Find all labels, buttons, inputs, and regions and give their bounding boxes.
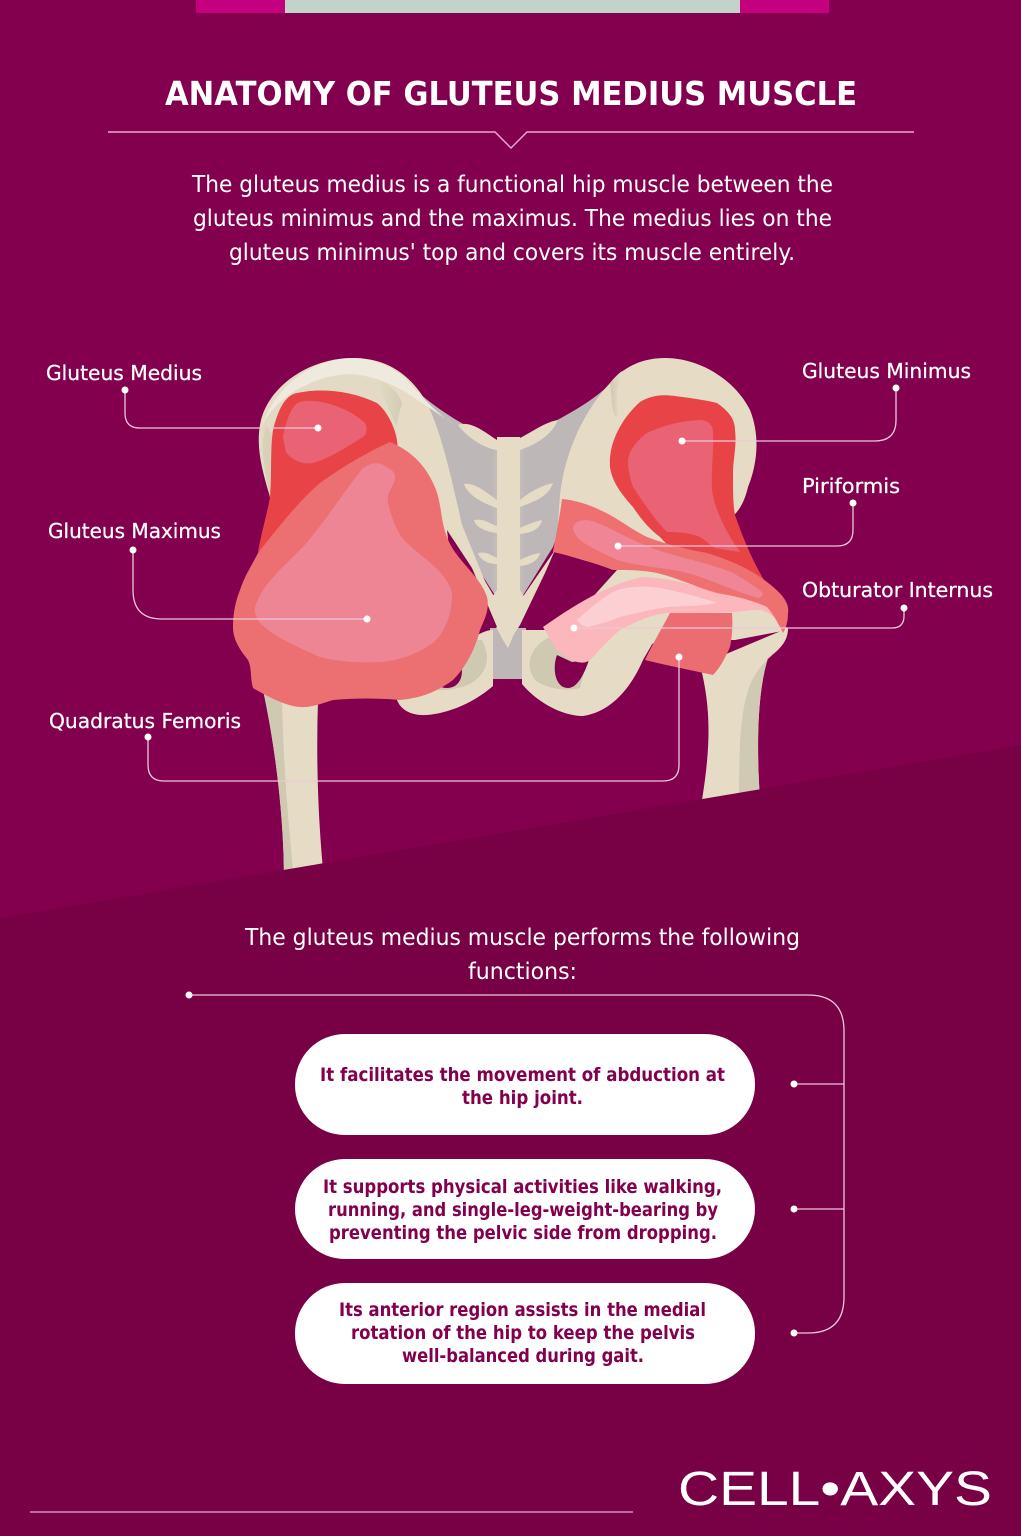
label: Obturator Internus [570, 578, 993, 632]
muscle: piriformis [553, 499, 788, 633]
intro text: gluteus minimus and the maximus. The medius lies on the [193, 204, 832, 232]
femur: left [263, 690, 324, 880]
pubis: left [397, 630, 493, 715]
pubis: right [522, 600, 670, 716]
muscle: gluteus medius (left) [258, 390, 400, 552]
function pill 2: running, and single-leg-weight-bearing by [328, 1200, 718, 1221]
function pill 2 [295, 1159, 755, 1259]
muscle: gluteus maximus (left) [233, 442, 488, 707]
ligaments: grey sacral area [405, 380, 612, 597]
footer line [30, 1511, 633, 1513]
label: Gluteus Maximus: Gluteus Maximus [48, 519, 221, 543]
label: Piriformis: Piriformis [802, 474, 900, 498]
intro text: gluteus minimus' top and covers its muscle entirely. [229, 238, 795, 266]
label: Gluteus Maximus [48, 519, 370, 622]
function pill 3: Its anterior region assists in the medial [339, 1300, 706, 1321]
muscle: gluteus minimus (right) [610, 395, 775, 600]
functions heading: functions: [468, 957, 577, 985]
lower section background [0, 745, 1021, 1536]
muscle: obturator internus [543, 577, 783, 663]
label: Gluteus Minimus: Gluteus Minimus [802, 359, 971, 383]
label: Gluteus Medius: Gluteus Medius [46, 361, 202, 385]
function pill 1: It facilitates the movement of abduction at [320, 1065, 725, 1086]
function pill 2: It supports physical activities like walking, [323, 1177, 722, 1198]
label: Quadratus Femoris: Quadratus Femoris [49, 709, 241, 733]
functions heading [244, 923, 800, 985]
femur: right [700, 628, 788, 800]
intro text [191, 170, 833, 266]
ilium: right [556, 358, 788, 660]
function pill 3: rotation of the hip to keep the pelvis [351, 1323, 695, 1344]
function pill 1: the hip joint. [462, 1088, 583, 1109]
label: Piriformis [614, 474, 900, 550]
functions heading: The gluteus medius muscle performs the following [244, 923, 800, 951]
intro text: The gluteus medius is a functional hip muscle between the [191, 170, 833, 198]
function pill 2: preventing the pelvic side from dropping. [329, 1223, 717, 1244]
top colour bar [196, 0, 829, 13]
title: ANATOMY OF GLUTEUS MEDIUS MUSCLE [165, 75, 857, 113]
label: Gluteus Medius [46, 361, 322, 432]
bracket connector [186, 992, 844, 1336]
label: Obturator Internus: Obturator Internus [802, 578, 993, 602]
label: Quadratus Femoris [49, 654, 682, 781]
gap behind sacrum band [447, 530, 497, 627]
sacrum [452, 420, 558, 648]
pubic connection [490, 628, 526, 679]
function pill 1 [295, 1034, 755, 1135]
label: Gluteus Minimus [678, 359, 971, 444]
title divider with chevron [108, 132, 914, 148]
function pill 3 [295, 1283, 755, 1384]
pelvis anatomy illustration [233, 358, 788, 880]
function pill 3: well-balanced during gait. [402, 1346, 644, 1367]
ilium: left [259, 358, 505, 630]
logo: CELL•AXYS [678, 1463, 992, 1516]
muscle: quadratus femoris [645, 613, 732, 675]
